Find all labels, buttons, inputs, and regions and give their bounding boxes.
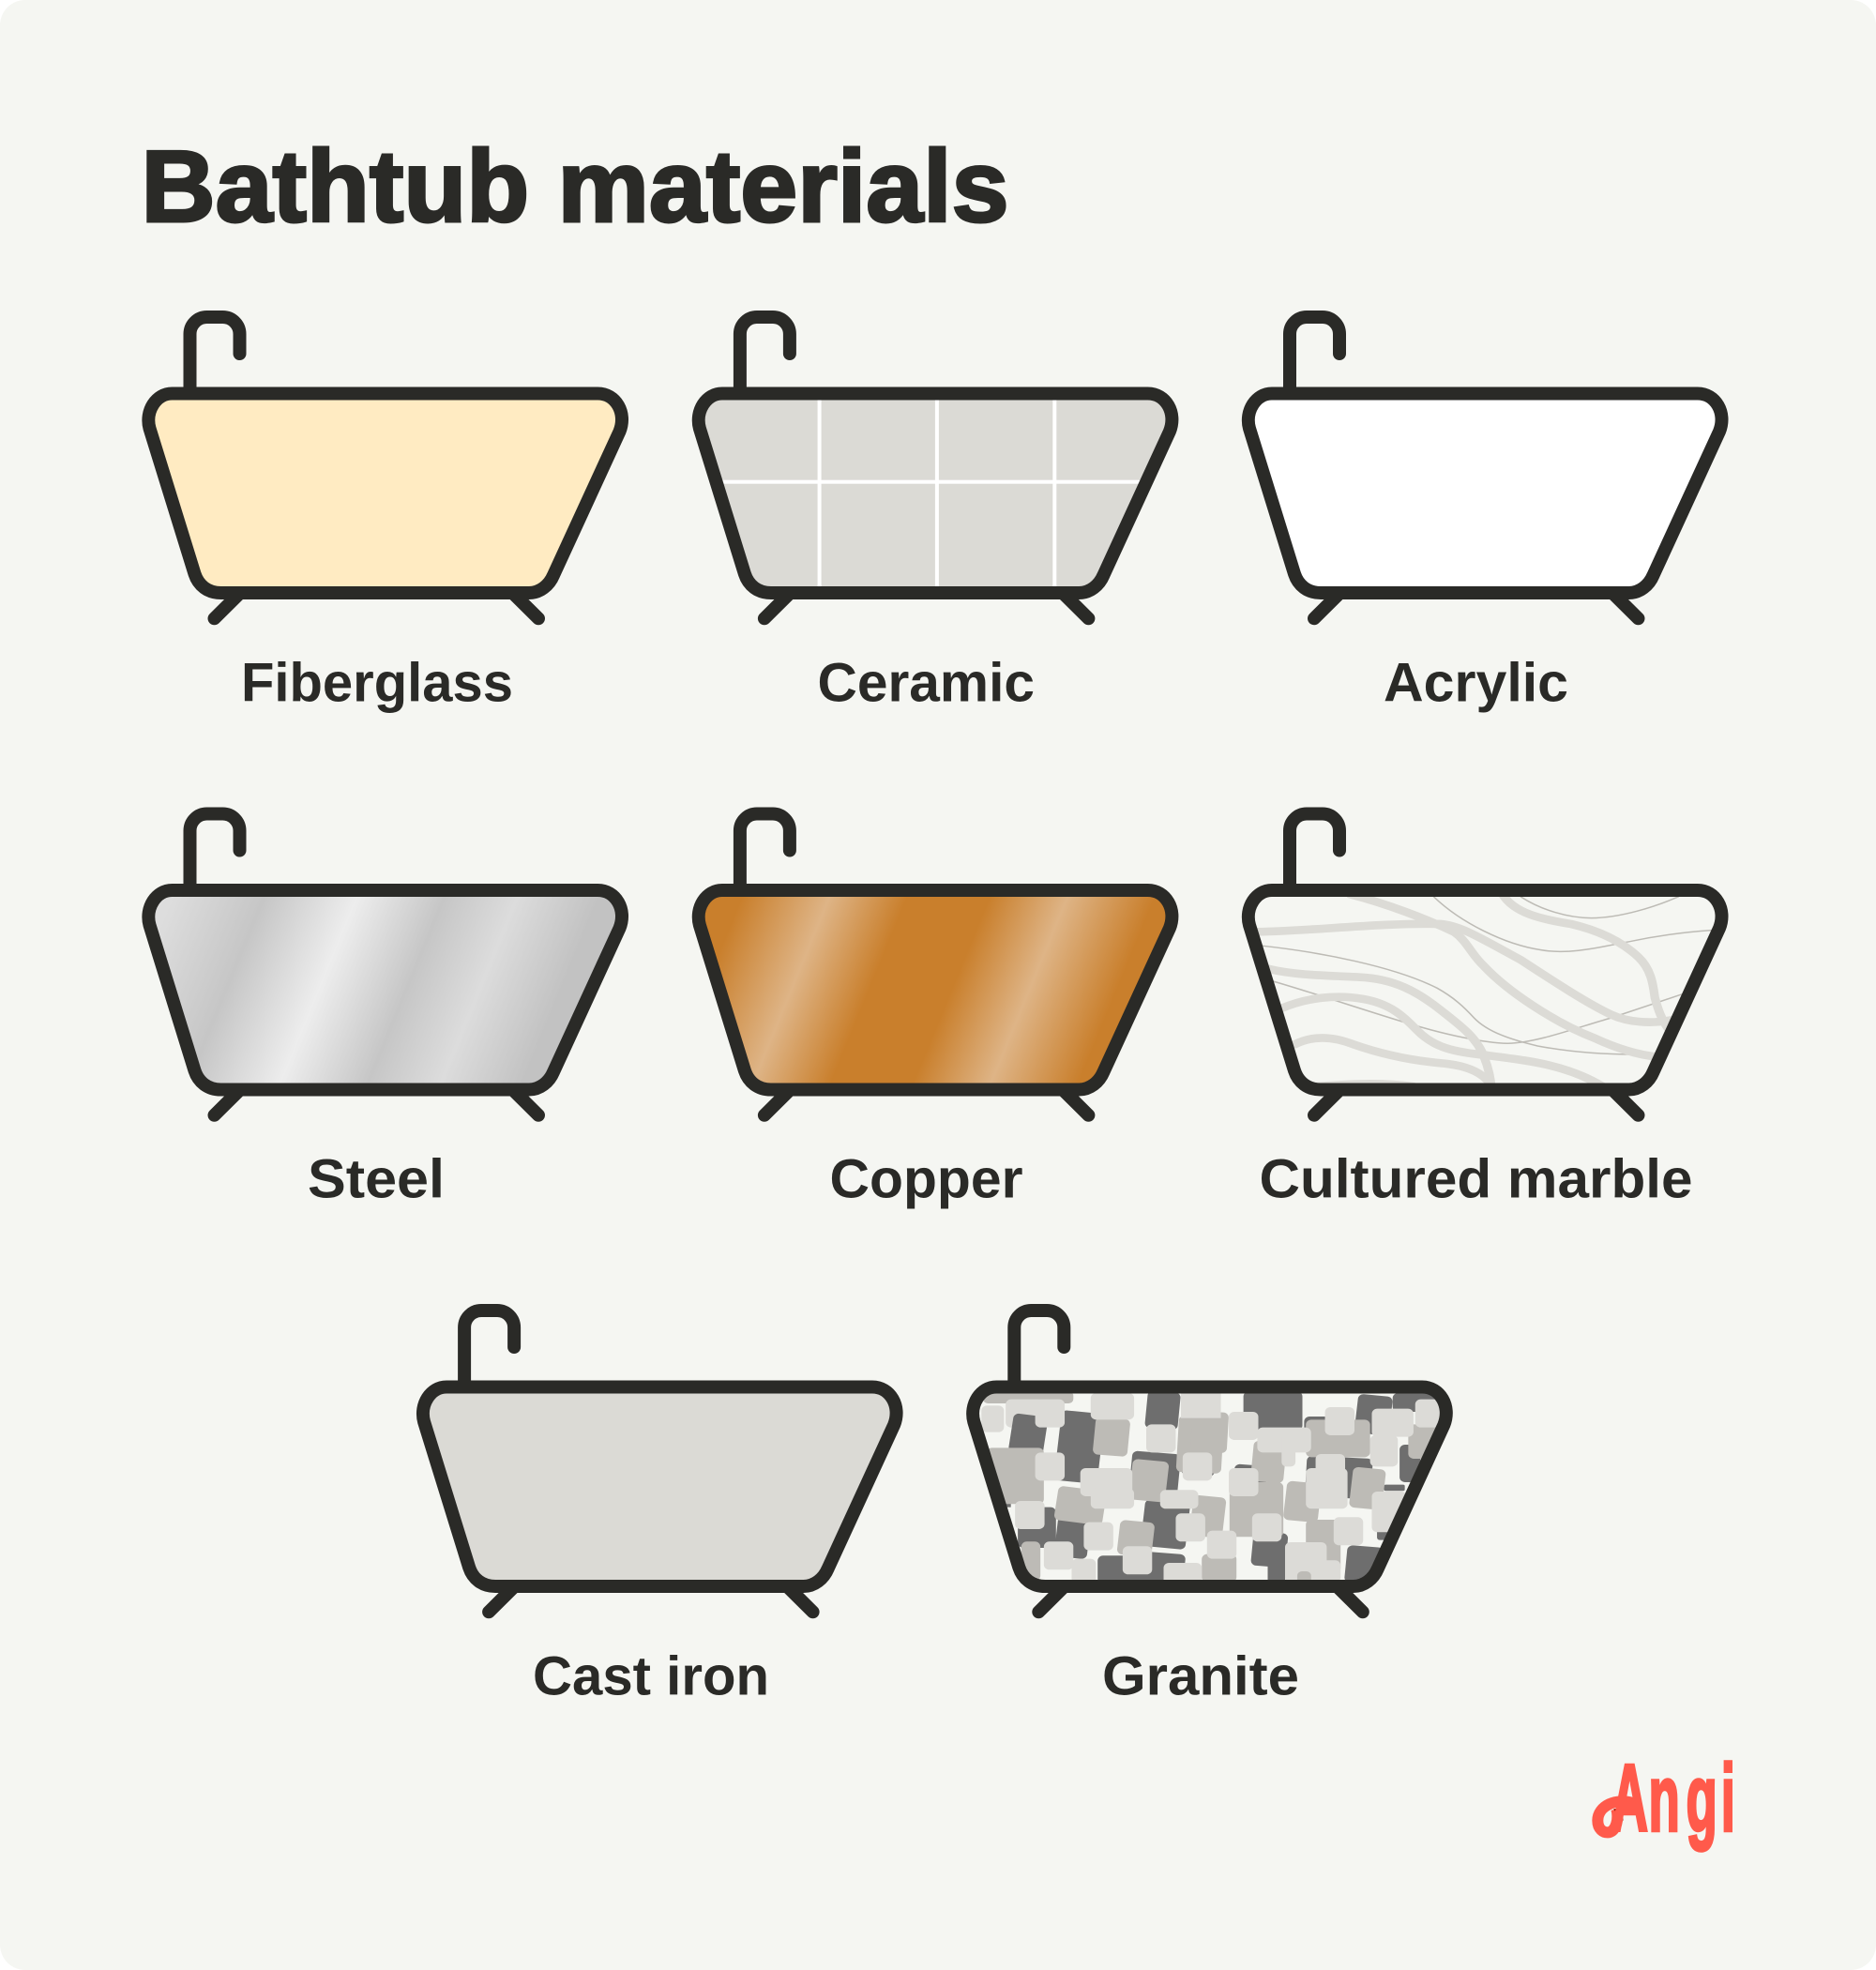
label: Acrylic: Acrylic	[1384, 653, 1568, 714]
panel: steel	[148, 814, 622, 1210]
panel: cultured marble	[1248, 814, 1722, 1210]
icon: cast iron bathtub	[423, 1311, 897, 1612]
icon: acrylic bathtub	[1248, 317, 1722, 618]
panel: acrylic	[1248, 317, 1722, 714]
panel: copper	[699, 814, 1172, 1210]
title: Bathtub materials	[141, 129, 1009, 244]
icon: ceramic bathtub	[692, 317, 1178, 618]
label: Copper: Copper	[829, 1149, 1022, 1210]
icon: granite bathtub	[973, 1311, 1446, 1612]
label: Granite: Granite	[1102, 1645, 1299, 1706]
icon: cultured marble bathtub	[1248, 814, 1722, 1115]
icon: fiberglass bathtub	[148, 317, 622, 618]
panel: ceramic	[692, 317, 1178, 714]
label: Cultured marble: Cultured marble	[1259, 1149, 1692, 1210]
label: Ceramic: Ceramic	[818, 653, 1035, 714]
logo: Angi: Angi	[1611, 1747, 1735, 1852]
icon: steel bathtub	[148, 814, 622, 1115]
panel: granite	[973, 1311, 1446, 1706]
panel: fiberglass	[148, 317, 622, 714]
panel: cast iron	[423, 1311, 897, 1706]
label: Fiberglass: Fiberglass	[241, 653, 513, 714]
label: Steel: Steel	[308, 1149, 445, 1210]
label: Cast iron: Cast iron	[533, 1645, 769, 1706]
icon: copper bathtub	[699, 814, 1172, 1115]
